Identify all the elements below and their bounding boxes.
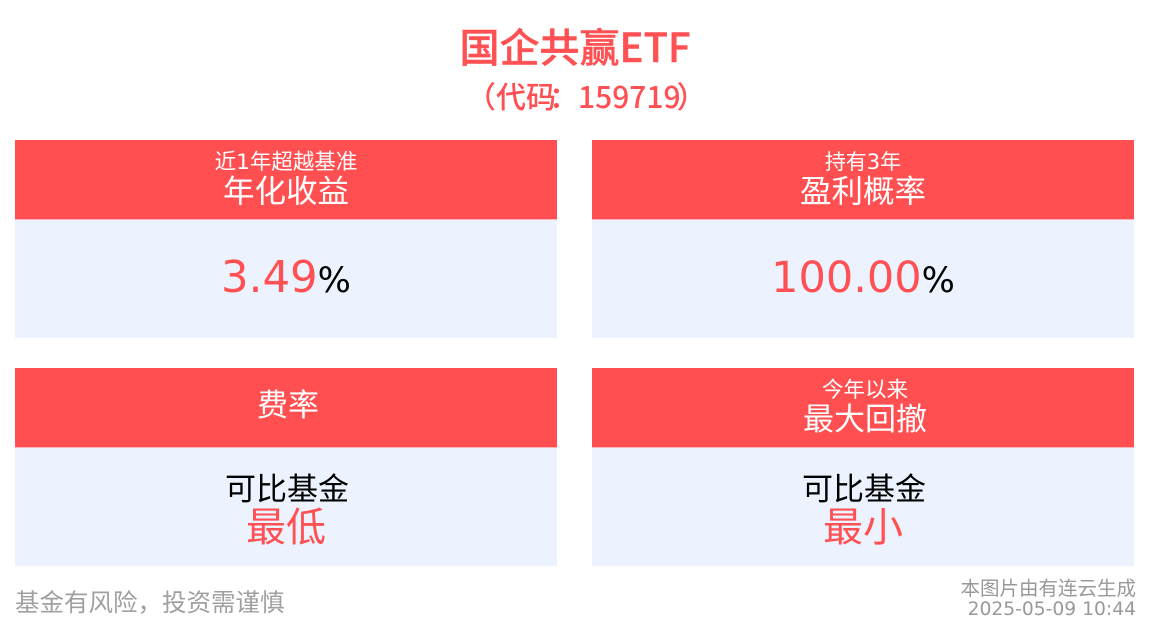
value: 100.00%: [771, 253, 955, 303]
source and timestamp: [960, 577, 1136, 620]
panel: annualized return: [15, 140, 557, 338]
value: 3.49%: [221, 253, 351, 303]
header caption: 今年以来: [822, 378, 908, 403]
source and timestamp: 2025-05-09 10:44: [968, 599, 1136, 620]
source and timestamp: 本图片由有连云生成: [960, 577, 1136, 600]
panel body: [15, 447, 557, 566]
subtitle: fund code: （代码：159719）: [466, 73, 707, 117]
panel body: [592, 447, 1134, 566]
comparison result: 最低: [246, 505, 326, 551]
panel header: [15, 368, 557, 447]
panel header: [592, 140, 1134, 219]
risk note: 基金有风险，投资需谨慎: [15, 588, 284, 617]
panel body: [15, 219, 557, 338]
header caption: 近1年超越基准: [215, 150, 357, 175]
header title: 最大回撤: [803, 402, 927, 438]
title: 国企共赢ETF: [459, 16, 691, 74]
panel header: [15, 140, 557, 219]
header caption: 持有3年: [825, 150, 901, 174]
panel: max drawdown: [592, 368, 1134, 566]
panel: fee rate: [15, 368, 557, 566]
comparison label: 可比基金: [225, 472, 349, 508]
panel header: [592, 368, 1134, 447]
header title: 年化收益: [223, 174, 349, 210]
comparison label: 可比基金: [802, 472, 926, 508]
panel: probability of profit: [592, 140, 1134, 338]
header title: 盈利概率: [800, 174, 926, 210]
panel body: [592, 219, 1134, 338]
comparison result: 最小: [823, 505, 903, 551]
header title: 费率: [257, 388, 319, 424]
